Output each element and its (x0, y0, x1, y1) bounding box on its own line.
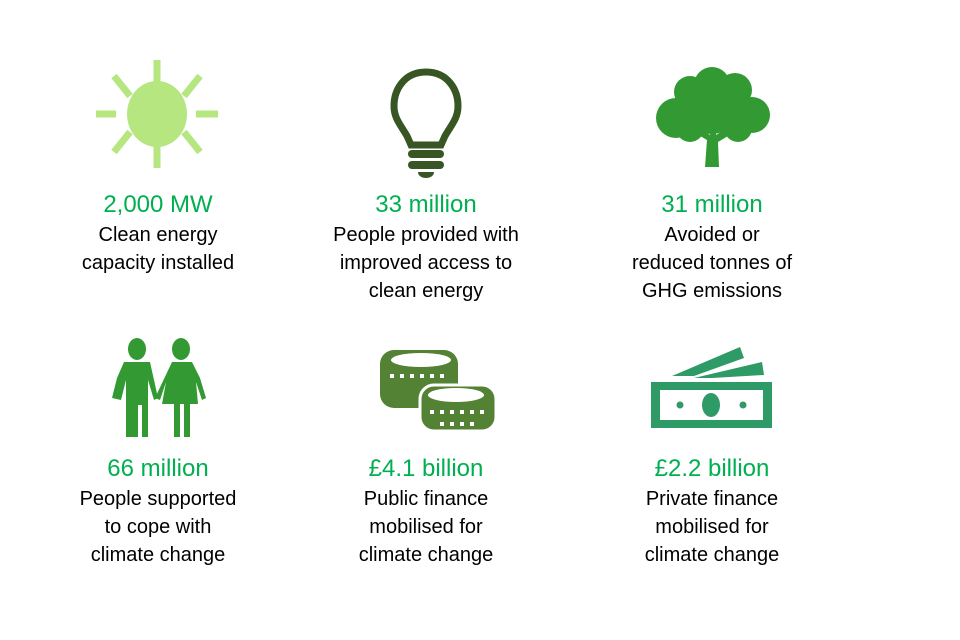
stat: private finance: climate change (645, 544, 779, 566)
stat: clean energy capacity (82, 191, 234, 274)
stat: public finance (359, 455, 493, 566)
icon: people (112, 338, 206, 437)
stat: public finance: Public finance (364, 488, 488, 510)
icon: sun (96, 60, 218, 168)
icon: tree (656, 67, 770, 167)
stat: GHG: 31 million (661, 191, 763, 218)
stat: people access: 33 million (375, 191, 477, 218)
stat: people supported: to cope with (105, 516, 211, 538)
stat: public finance: mobilised for (369, 516, 483, 538)
stat: people supported: climate change (91, 544, 225, 566)
stat: people access: improved access to (340, 252, 512, 274)
stat: private finance: Private finance (646, 488, 778, 510)
stat: private finance: £2.2 billion (655, 455, 769, 482)
stat: public finance: climate change (359, 544, 493, 566)
stat: people supported (80, 455, 236, 566)
icon: banknotes (651, 347, 772, 428)
stat: people supported: People supported (80, 488, 236, 510)
icon: coins (380, 350, 496, 431)
stat: private finance: mobilised for (655, 516, 769, 538)
stat: public finance: £4.1 billion (369, 455, 483, 482)
stat: clean energy capacity: Clean energy (99, 224, 217, 246)
stat: clean energy capacity: capacity installed (82, 252, 234, 274)
stat: GHG (632, 191, 792, 302)
stat: people access: People provided with (333, 224, 519, 246)
stat: clean energy capacity: 2,000 MW (103, 191, 213, 218)
icon: light bulb (394, 72, 458, 178)
stat: people supported: 66 million (107, 455, 209, 482)
stat: people access (333, 191, 519, 302)
stat: private finance (645, 455, 779, 566)
stat: GHG: Avoided or (664, 224, 760, 246)
stat: people access: clean energy (369, 280, 483, 302)
stat: GHG: reduced tonnes of (632, 252, 792, 274)
stat: GHG: GHG emissions (642, 280, 782, 302)
